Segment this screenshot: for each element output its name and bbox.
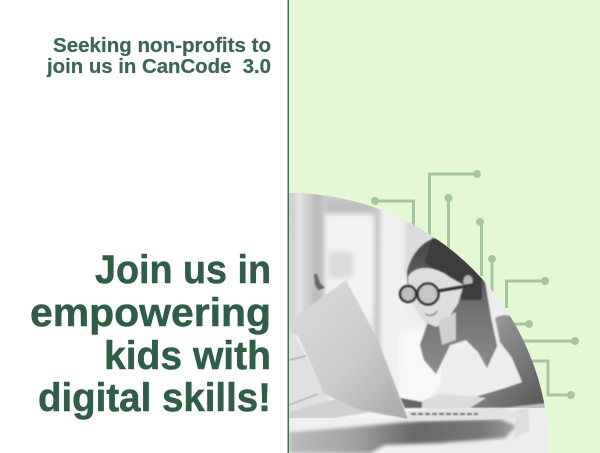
heading: empowering bbox=[30, 291, 271, 335]
pillows bbox=[289, 336, 369, 418]
heading bbox=[30, 248, 271, 420]
hair bbox=[407, 238, 497, 374]
icon: door handle bbox=[314, 274, 325, 290]
subtitle: Seeking non-profits to bbox=[53, 35, 271, 57]
glasses bbox=[400, 284, 473, 304]
arm bbox=[465, 315, 546, 408]
legs bbox=[289, 419, 516, 453]
bed bbox=[289, 418, 335, 424]
face bbox=[408, 268, 473, 345]
girl body and dress bbox=[400, 315, 546, 410]
heading: digital skills! bbox=[38, 376, 271, 420]
heading: Join us in bbox=[95, 248, 271, 292]
panel: light green right side bbox=[288, 0, 600, 453]
subtitle bbox=[46, 35, 271, 78]
laptop lid bbox=[291, 280, 408, 419]
laptop base bbox=[407, 408, 527, 421]
vertical divider bbox=[288, 0, 289, 453]
photo: girl using a laptop bbox=[289, 190, 553, 453]
heading: kids with bbox=[104, 334, 271, 378]
subtitle: join us in CanCode 3.0 bbox=[46, 56, 271, 78]
circuit lines graphic bbox=[371, 170, 579, 399]
panel: white left side bbox=[0, 0, 288, 453]
